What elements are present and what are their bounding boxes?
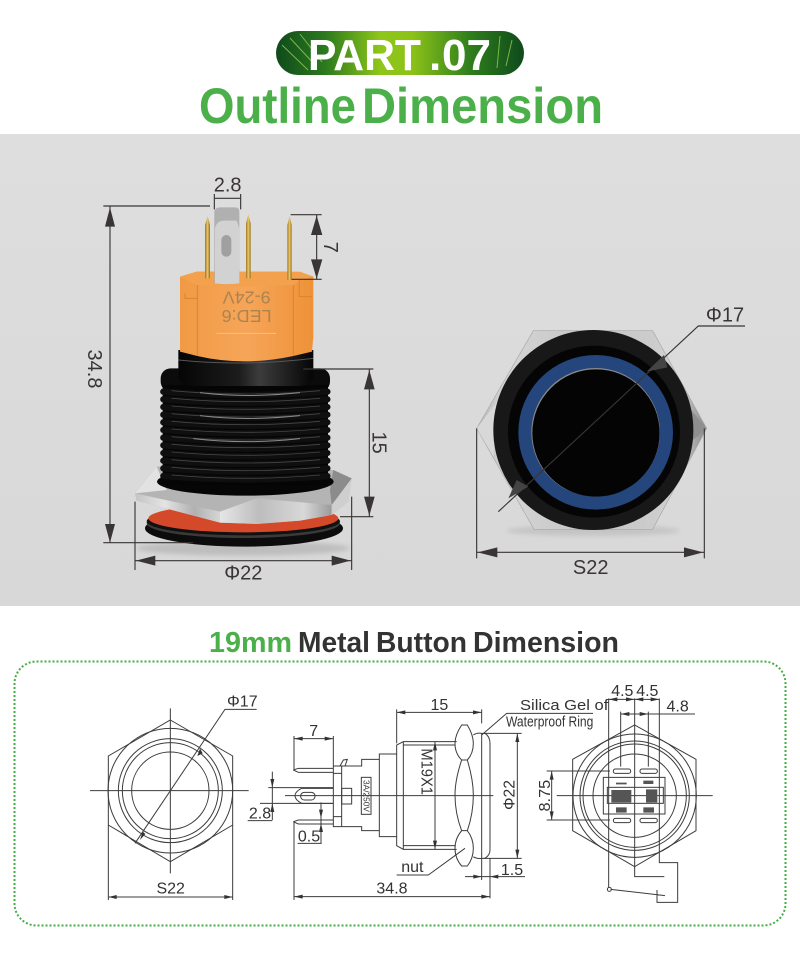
panel: technical drawings [14, 660, 786, 926]
drawing: side view: 15 [430, 697, 448, 714]
terminals and pins [205, 207, 292, 284]
dimension: S22 across flats [477, 428, 704, 579]
title: Outline Dimension: Outline [199, 78, 356, 134]
dimension: S22 across flats: S22 [573, 557, 608, 579]
drawing: rear view with terminals: 4.5 [636, 683, 659, 700]
dimension: 34.8 height [83, 206, 210, 543]
heading: 19mm Metal Button Dimension: Dimension [473, 627, 619, 659]
drawing: side view: 34.8 [376, 880, 408, 897]
dimension: diameter 17 leader [498, 305, 745, 512]
orange base: LED:6 [222, 306, 272, 326]
drawing: side view: 1.5 [501, 862, 523, 879]
dimension: 15 thread length: 15 [368, 432, 390, 454]
dimension: diameter 17 leader: Φ17 [706, 305, 744, 327]
drawing: side view: M19X1 [418, 748, 435, 795]
o-rings and hex nut [135, 350, 352, 547]
orange base [180, 272, 313, 361]
drawing: side view: 2.8 [249, 806, 271, 823]
dimension: 7 pin length [291, 215, 341, 279]
drawing: front view: Φ17 [227, 694, 258, 711]
drawing: side view [248, 697, 608, 900]
drawing: rear view with terminals: 4.5 [611, 683, 634, 700]
dimension: diameter 22 [135, 497, 352, 584]
black bezel and blue LED ring [493, 330, 693, 530]
orange base: 9-24V [223, 288, 271, 308]
heading: 19mm Metal Button Dimension [209, 627, 619, 659]
badge: PART.07: 07 [442, 31, 491, 80]
dimension: 2.8 blade width [214, 175, 242, 209]
drawing: rear view with terminals [537, 683, 713, 902]
badge: PART.07: . [429, 31, 441, 80]
dimension: 2.8 blade width: 2.8 [214, 175, 242, 197]
title: Outline Dimension: Dimension [362, 78, 603, 134]
header: part badge and title [199, 31, 603, 134]
drawing: side view: Silica Gel of [520, 698, 608, 714]
threaded barrel [157, 368, 334, 496]
dimension: 15 thread length [303, 369, 390, 517]
drawing: side view: Φ22 [502, 780, 519, 810]
drawing: front view [90, 694, 258, 900]
heading: 19mm Metal Button Dimension: 19mm [209, 627, 292, 659]
drawing: rear view with terminals: 8.75 [537, 780, 554, 811]
dimension: 34.8 height: 34.8 [83, 350, 105, 388]
drawing: side view: Waterproof Ring [506, 715, 593, 731]
drawing: front view: S22 [156, 880, 185, 897]
drawing: side view: 7 [309, 723, 318, 740]
badge: PART.07: PART [308, 31, 421, 80]
heading: 19mm Metal Button Dimension: Button [376, 627, 467, 659]
badge: PART.07 [276, 31, 524, 80]
photo: front view of the button [477, 305, 745, 579]
drawing: side view: 0.5 [298, 828, 320, 845]
black collar [178, 350, 313, 386]
heading: 19mm Metal Button Dimension: Metal [298, 627, 370, 659]
title: Outline Dimension [199, 78, 603, 134]
photo: side view of the button [83, 175, 390, 584]
drawing: side view: nut [401, 859, 424, 876]
rating label: 3A/250V [361, 780, 371, 812]
dimension: 7 pin length: 7 [319, 242, 341, 253]
drawing: rear view with terminals: 4.8 [667, 699, 689, 716]
dimension: diameter 22: Φ22 [224, 562, 262, 584]
hex nut [477, 331, 707, 529]
panel: product photo dimensions [0, 134, 800, 606]
